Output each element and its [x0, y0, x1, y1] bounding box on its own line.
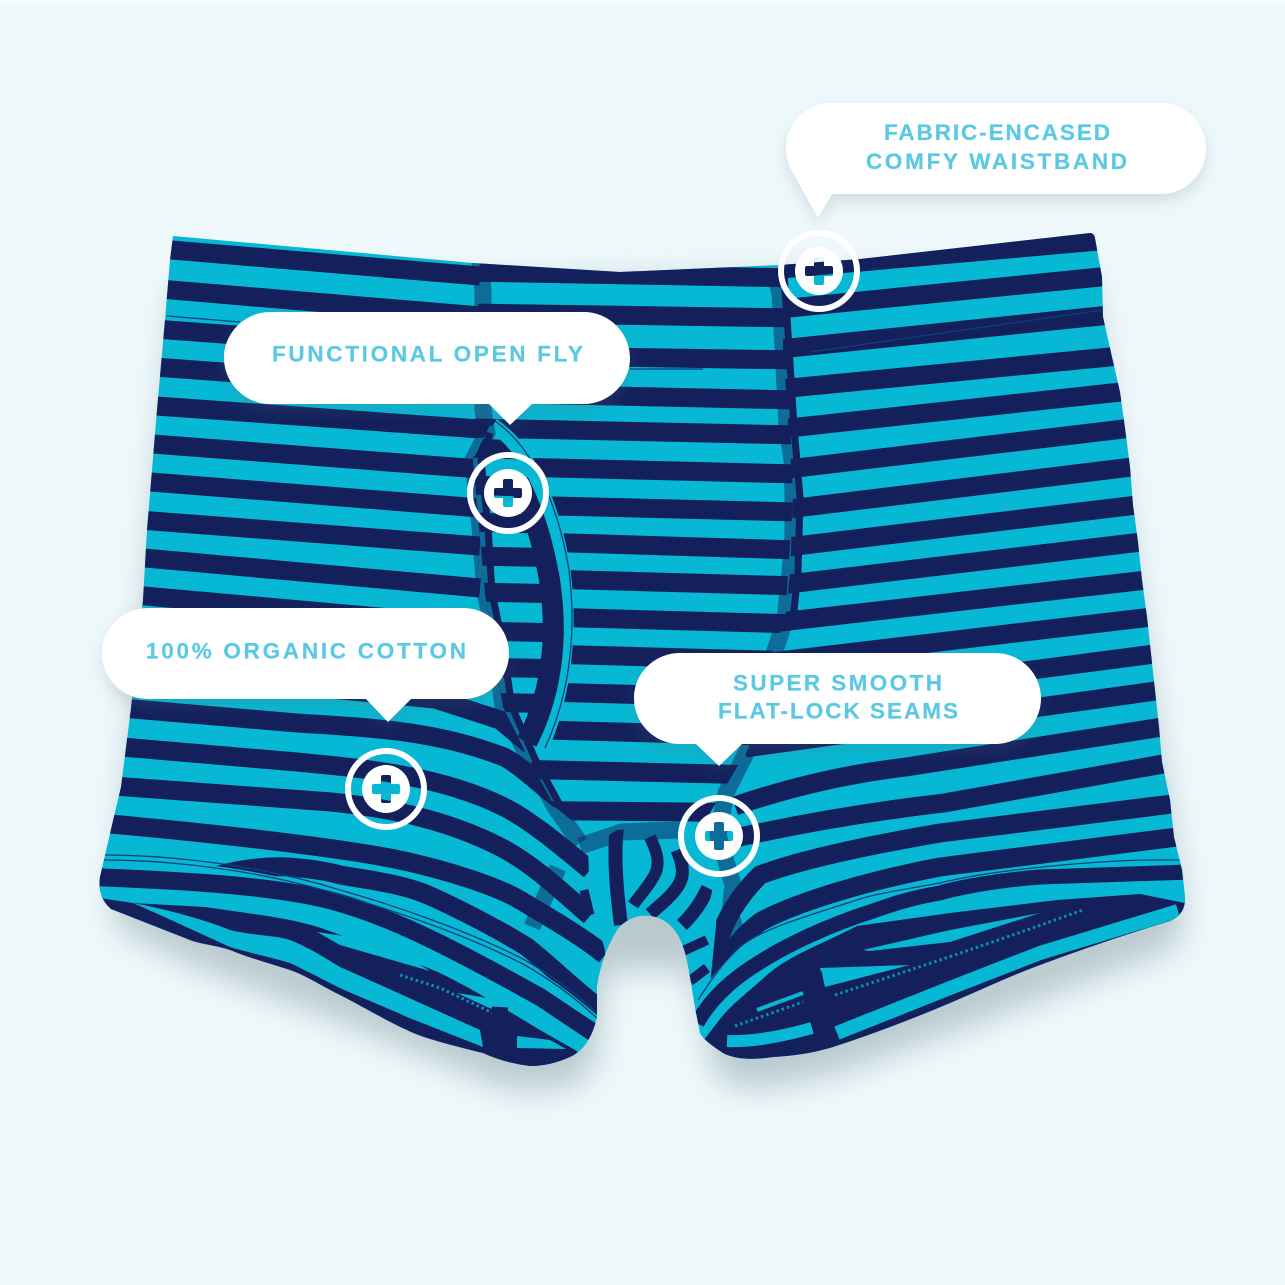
garment shadow [113, 275, 1183, 1091]
left panel stripes [100, 244, 605, 1012]
icon: plus marker on fabric [348, 751, 424, 827]
callout: organic cotton: 100% ORGANIC COTTON [146, 638, 466, 664]
centre panel stripes [470, 272, 800, 813]
callout: waistband: FABRIC-ENCASED [884, 120, 1110, 145]
callout: waistband [786, 103, 1206, 218]
callout: open fly: FUNCTIONAL OPEN FLY [272, 342, 583, 366]
callout: open fly [224, 312, 630, 425]
left leg hem [99, 854, 597, 1066]
callout: flat-lock seams: FLAT-LOCK SEAMS [718, 698, 958, 724]
waistband stitching [167, 310, 1103, 369]
callout: organic cotton [102, 608, 509, 722]
seams [473, 262, 800, 950]
fly panel [470, 420, 580, 770]
callout: flat-lock seams: SUPER SMOOTH [733, 670, 942, 696]
right panel stripes [703, 240, 1185, 1016]
infographic canvas [98, 103, 1210, 1106]
icon: plus marker on seam [681, 798, 757, 874]
icon: plus marker on waistband [781, 233, 857, 309]
callout: waistband: COMFY WAISTBAND [866, 149, 1127, 174]
crotch gusset [580, 825, 716, 1007]
callout: flat-lock seams [634, 653, 1041, 766]
right leg hem [694, 859, 1186, 1059]
striped boxer briefs [80, 220, 1200, 1090]
icon: plus marker on fly [470, 455, 546, 531]
